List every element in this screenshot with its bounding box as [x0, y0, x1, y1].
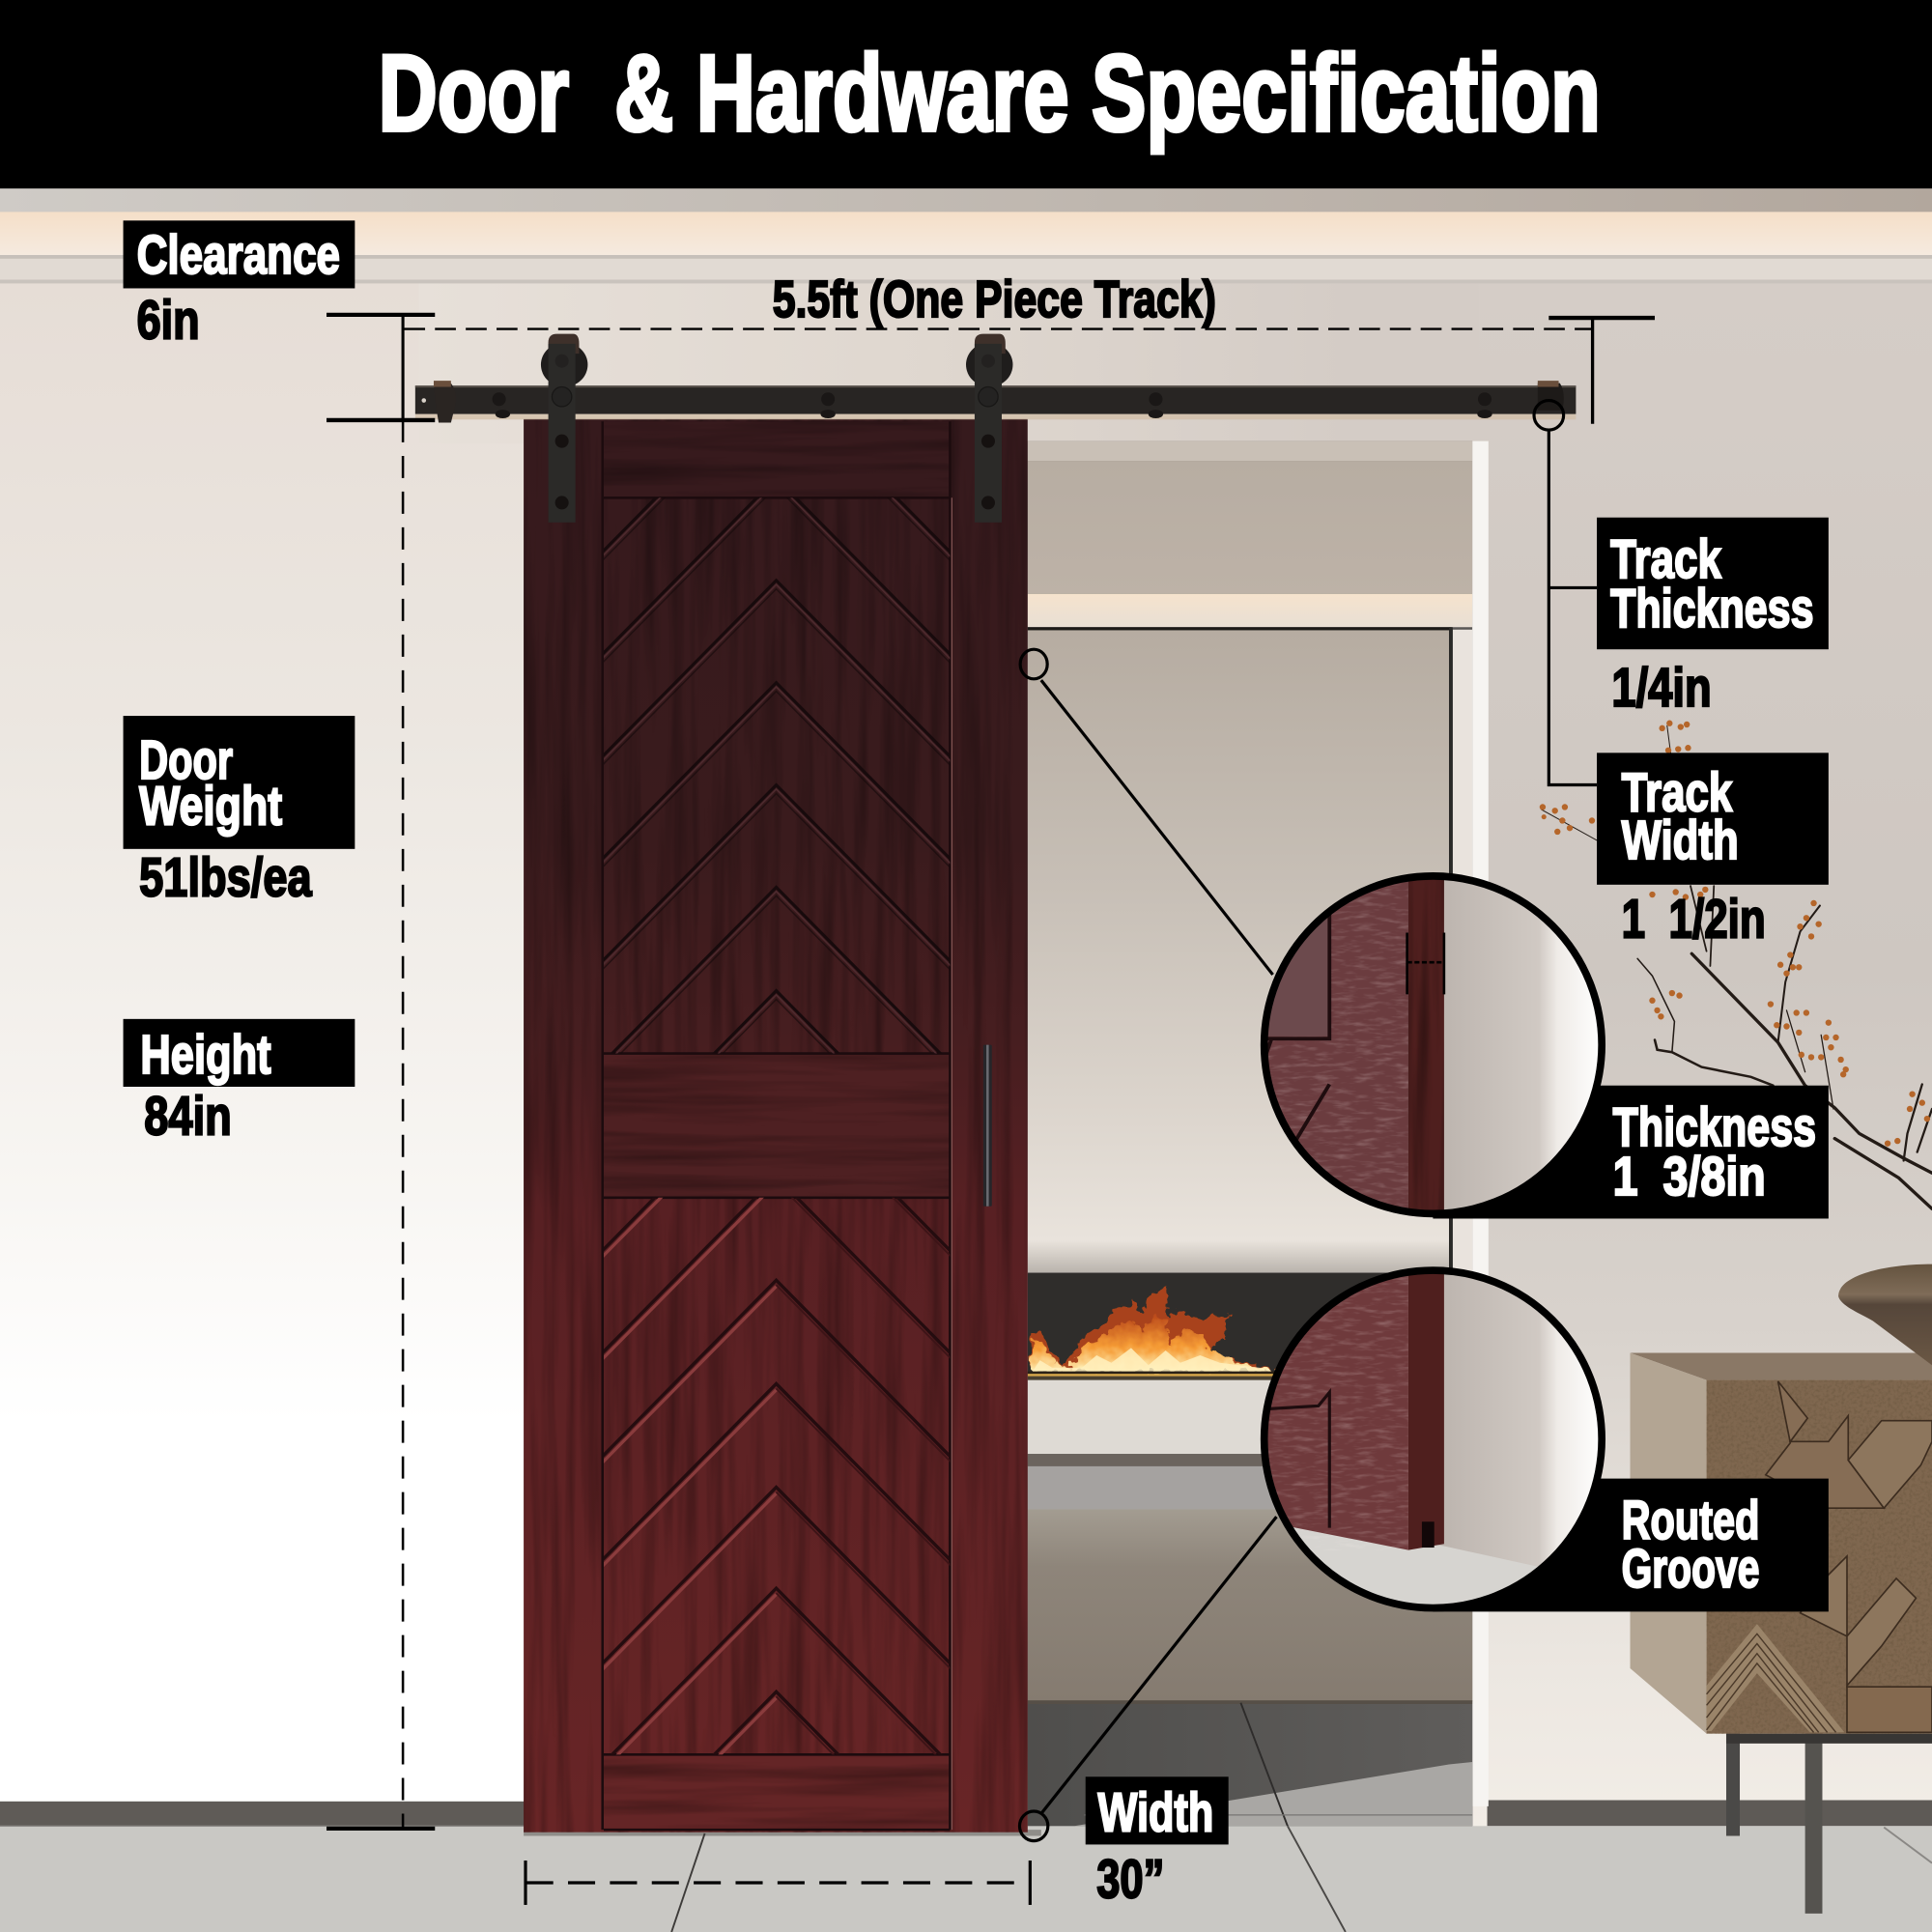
- value: track width: 1 1/2in: [1622, 889, 1766, 950]
- text: thickness: Thickness: [1613, 1096, 1816, 1157]
- barn door: [524, 376, 1028, 1886]
- value: width: 30”: [1096, 1848, 1164, 1909]
- bowl on cabinet: [1838, 1264, 1932, 1365]
- door handle: [983, 1045, 992, 1207]
- left roller strap: [541, 334, 587, 523]
- magnifier: door edge thickness detail: [1257, 868, 1614, 1226]
- label: door weight: Weight: [139, 775, 282, 836]
- value: track thickness: 1/4in: [1611, 657, 1712, 718]
- height dimension line with clearance ticks: [327, 314, 435, 1829]
- track stops: [421, 381, 1564, 423]
- text: groove: Groove: [1622, 1538, 1759, 1599]
- cabinet legs: [1726, 1734, 1932, 1914]
- label: height: [124, 1019, 355, 1087]
- floor tiles: [0, 1815, 1932, 1932]
- right roller strap: [966, 334, 1012, 523]
- value: height: 84in: [144, 1086, 232, 1147]
- track rail: [415, 385, 1576, 419]
- thickness callout leader: [1020, 649, 1273, 975]
- panel: routed groove label: [1433, 1479, 1829, 1611]
- door base slab: [524, 419, 1028, 1833]
- label: height: Height: [140, 1024, 271, 1085]
- door frame grooves: [603, 421, 952, 1830]
- label: track thickness: [1597, 518, 1829, 649]
- cabinet: [1631, 1353, 1932, 1914]
- magnifier: routed groove detail: [1257, 1263, 1614, 1620]
- upper herringbone panel: [604, 497, 951, 1053]
- track lag bolts: [493, 392, 1492, 418]
- label: door weight: [124, 716, 355, 849]
- label: track length: 5.5ft (One Piece Track): [773, 271, 1216, 328]
- width dimension line: [526, 1861, 1030, 1905]
- label: clearance: Clearance: [137, 224, 340, 285]
- value: clearance: 6in: [137, 290, 200, 351]
- text: routed: Routed: [1622, 1490, 1759, 1550]
- door wood grain stiles and panels: [524, 419, 1028, 1833]
- groove callout leader: [1019, 1517, 1276, 1841]
- label: track width: Track: [1622, 761, 1733, 822]
- label: door weight: Door: [139, 729, 233, 790]
- label: track thickness: Thickness: [1610, 578, 1814, 639]
- value: door weight: 51lbs/ea: [139, 846, 312, 907]
- label: width: Width: [1097, 1781, 1213, 1842]
- sliding track hardware: [415, 334, 1576, 523]
- label: track width: [1597, 753, 1829, 885]
- track callout leader: [1534, 401, 1597, 784]
- door rails: [604, 421, 950, 1830]
- track length dimension line: [404, 318, 1655, 424]
- fireplace flames: [1028, 1289, 1274, 1380]
- cabinet chevron relief: [1707, 1624, 1844, 1732]
- label: track thickness: Track: [1610, 528, 1722, 589]
- label: track width: Width: [1622, 810, 1739, 870]
- decorative branches and berries: [1540, 721, 1932, 1208]
- panel: thickness label: [1433, 1086, 1829, 1218]
- title band: [0, 0, 1932, 188]
- text: thickness value: 1 3/8in: [1613, 1146, 1766, 1207]
- doorway opening with interior room: [1028, 441, 1489, 1828]
- lower herringbone panel: [604, 1198, 951, 1754]
- cabinet relief facets: [1766, 1381, 1932, 1732]
